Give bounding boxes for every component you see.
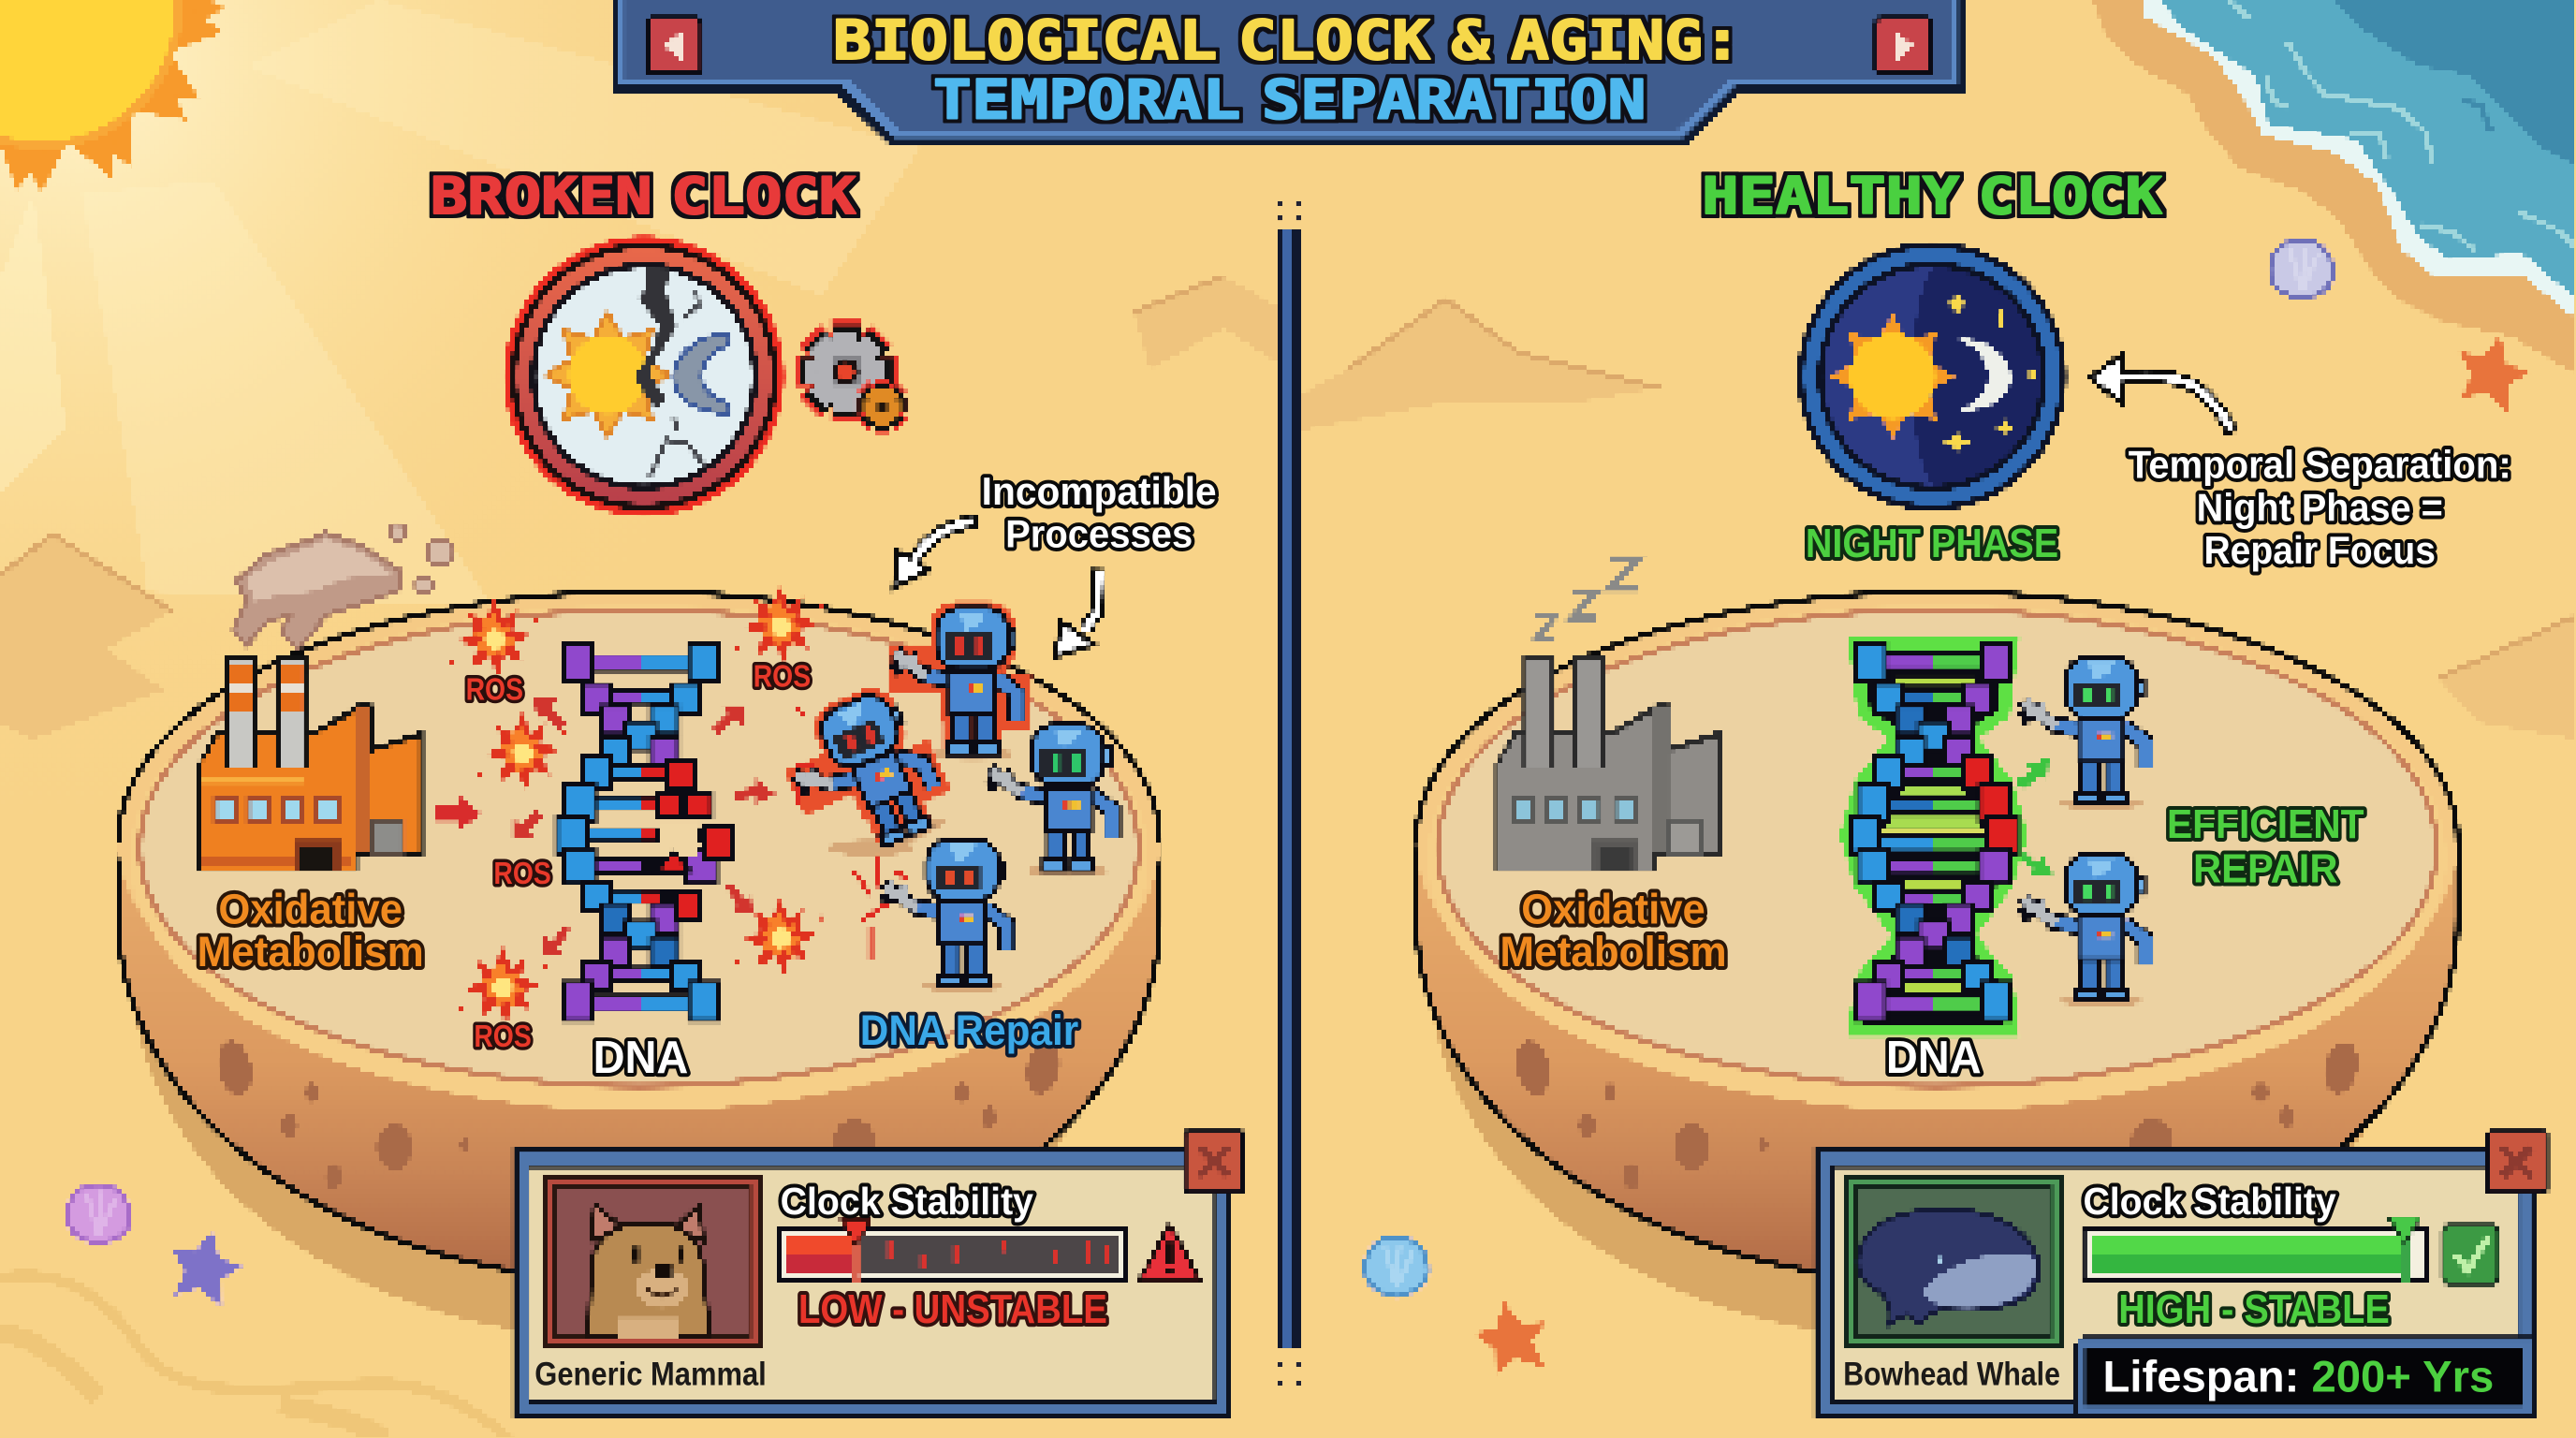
icon: healthy clock <box>1797 242 2067 511</box>
note: temporal separation: Temporal Separation: <box>2129 443 2511 487</box>
ROS arrows <box>513 698 775 956</box>
icon: green check <box>2443 1225 2499 1284</box>
note: incompatible processes: Processes <box>1005 511 1193 555</box>
label: efficient repair <box>2167 801 2364 891</box>
center divider <box>1278 200 1299 1387</box>
heading: broken clock: BROKEN CLOCK <box>431 167 856 226</box>
icon: broken clock <box>504 236 784 517</box>
labels: ROS: ROS <box>474 1020 532 1054</box>
icon: warning triangle <box>1138 1225 1201 1282</box>
label: DNA repair: DNA Repair <box>860 1006 1078 1054</box>
repair robots: efficient <box>2021 657 2145 1007</box>
portrait: mammal <box>546 1178 759 1345</box>
panel text: whale: HIGH - STABLE <box>2118 1286 2390 1332</box>
island: left <box>118 592 1160 1339</box>
panel: generic mammal <box>513 1132 1244 1419</box>
panel text: whale: Clock Stability <box>2083 1180 2336 1223</box>
title <box>833 8 1741 131</box>
label: night phase: NIGHT PHASE <box>1806 521 2058 566</box>
shells and starfish <box>67 240 2537 1380</box>
panel text: whale <box>1843 1180 2390 1393</box>
note: temporal separation: Repair Focus <box>2203 528 2436 572</box>
label: efficient repair: REPAIR <box>2193 845 2338 891</box>
arrow: metabolism to DNA <box>433 795 481 831</box>
title: TEMPORAL SEPARATION <box>933 67 1647 131</box>
factory: grey <box>1495 655 1721 873</box>
stability bar: low <box>779 1219 1127 1282</box>
label: oxidative metabolism left: Metabolism <box>198 928 424 976</box>
label: oxidative metabolism right <box>1500 885 1727 976</box>
note: temporal separation: Night Phase = <box>2197 485 2443 529</box>
sparks <box>795 707 907 961</box>
icon: close button <box>2487 1132 2546 1193</box>
panel text: mammal <box>534 1180 1107 1393</box>
arrow: incompatible 2 <box>1055 568 1099 657</box>
ocean <box>2093 0 2576 374</box>
sun <box>0 0 248 215</box>
labels: ROS: ROS <box>754 660 811 695</box>
title: BIOLOGICAL CLOCK & AGING: <box>833 8 1741 72</box>
note: incompatible processes <box>982 469 1217 555</box>
stability bar: high <box>2083 1218 2426 1282</box>
labels: ROS: ROS <box>466 673 523 708</box>
DNA: damaged <box>557 644 731 1020</box>
icon: sleeping Zzz <box>1536 559 1640 639</box>
label: oxidative metabolism right: Oxidative <box>1521 885 1705 932</box>
icon: right arrow button <box>1876 18 1930 74</box>
factory: orange <box>198 655 424 873</box>
panel text: whale: Bowhead Whale <box>1843 1357 2060 1393</box>
smoke <box>233 524 453 649</box>
arrow: to healthy clock <box>2089 355 2231 433</box>
lifespan value: Lifespan: 200+ Yrs <box>2103 1353 2494 1402</box>
arrow: incompatible 1 <box>894 521 977 588</box>
sand dunes <box>0 276 2576 740</box>
panel text: mammal: LOW - UNSTABLE <box>798 1286 1107 1332</box>
title banner <box>613 0 1965 144</box>
panel text: mammal: Clock Stability <box>781 1180 1033 1223</box>
label: oxidative metabolism left <box>198 885 424 976</box>
label: DNA left: DNA <box>593 1033 688 1083</box>
note: temporal separation <box>2129 443 2511 572</box>
label: DNA right: DNA <box>1886 1033 1982 1083</box>
chimneys <box>225 655 307 769</box>
icon: left arrow button <box>648 18 701 74</box>
repair robots: confused <box>767 601 1112 992</box>
lifespan box <box>2071 1336 2537 1418</box>
icon: gears <box>795 320 910 433</box>
label: efficient repair: EFFICIENT <box>2167 801 2364 847</box>
label: oxidative metabolism right: Metabolism <box>1500 928 1727 976</box>
green repair arrows <box>2014 757 2056 877</box>
heading: healthy clock: HEALTHY CLOCK <box>1702 167 2162 226</box>
island: right <box>1416 592 2458 1339</box>
DNA: healthy <box>1850 644 2017 1020</box>
DNA damage <box>657 761 731 920</box>
labels: ROS: ROS <box>493 857 551 891</box>
panel: bowhead whale <box>1814 1132 2546 1419</box>
note: incompatible processes: Incompatible <box>982 469 1217 513</box>
ROS explosions <box>450 585 825 1025</box>
label: oxidative metabolism left: Oxidative <box>218 885 402 932</box>
labels: ROS <box>466 660 811 1054</box>
portrait: whale <box>1847 1178 2060 1345</box>
icon: close button <box>1184 1132 1244 1193</box>
panel text: mammal: Generic Mammal <box>534 1357 767 1393</box>
